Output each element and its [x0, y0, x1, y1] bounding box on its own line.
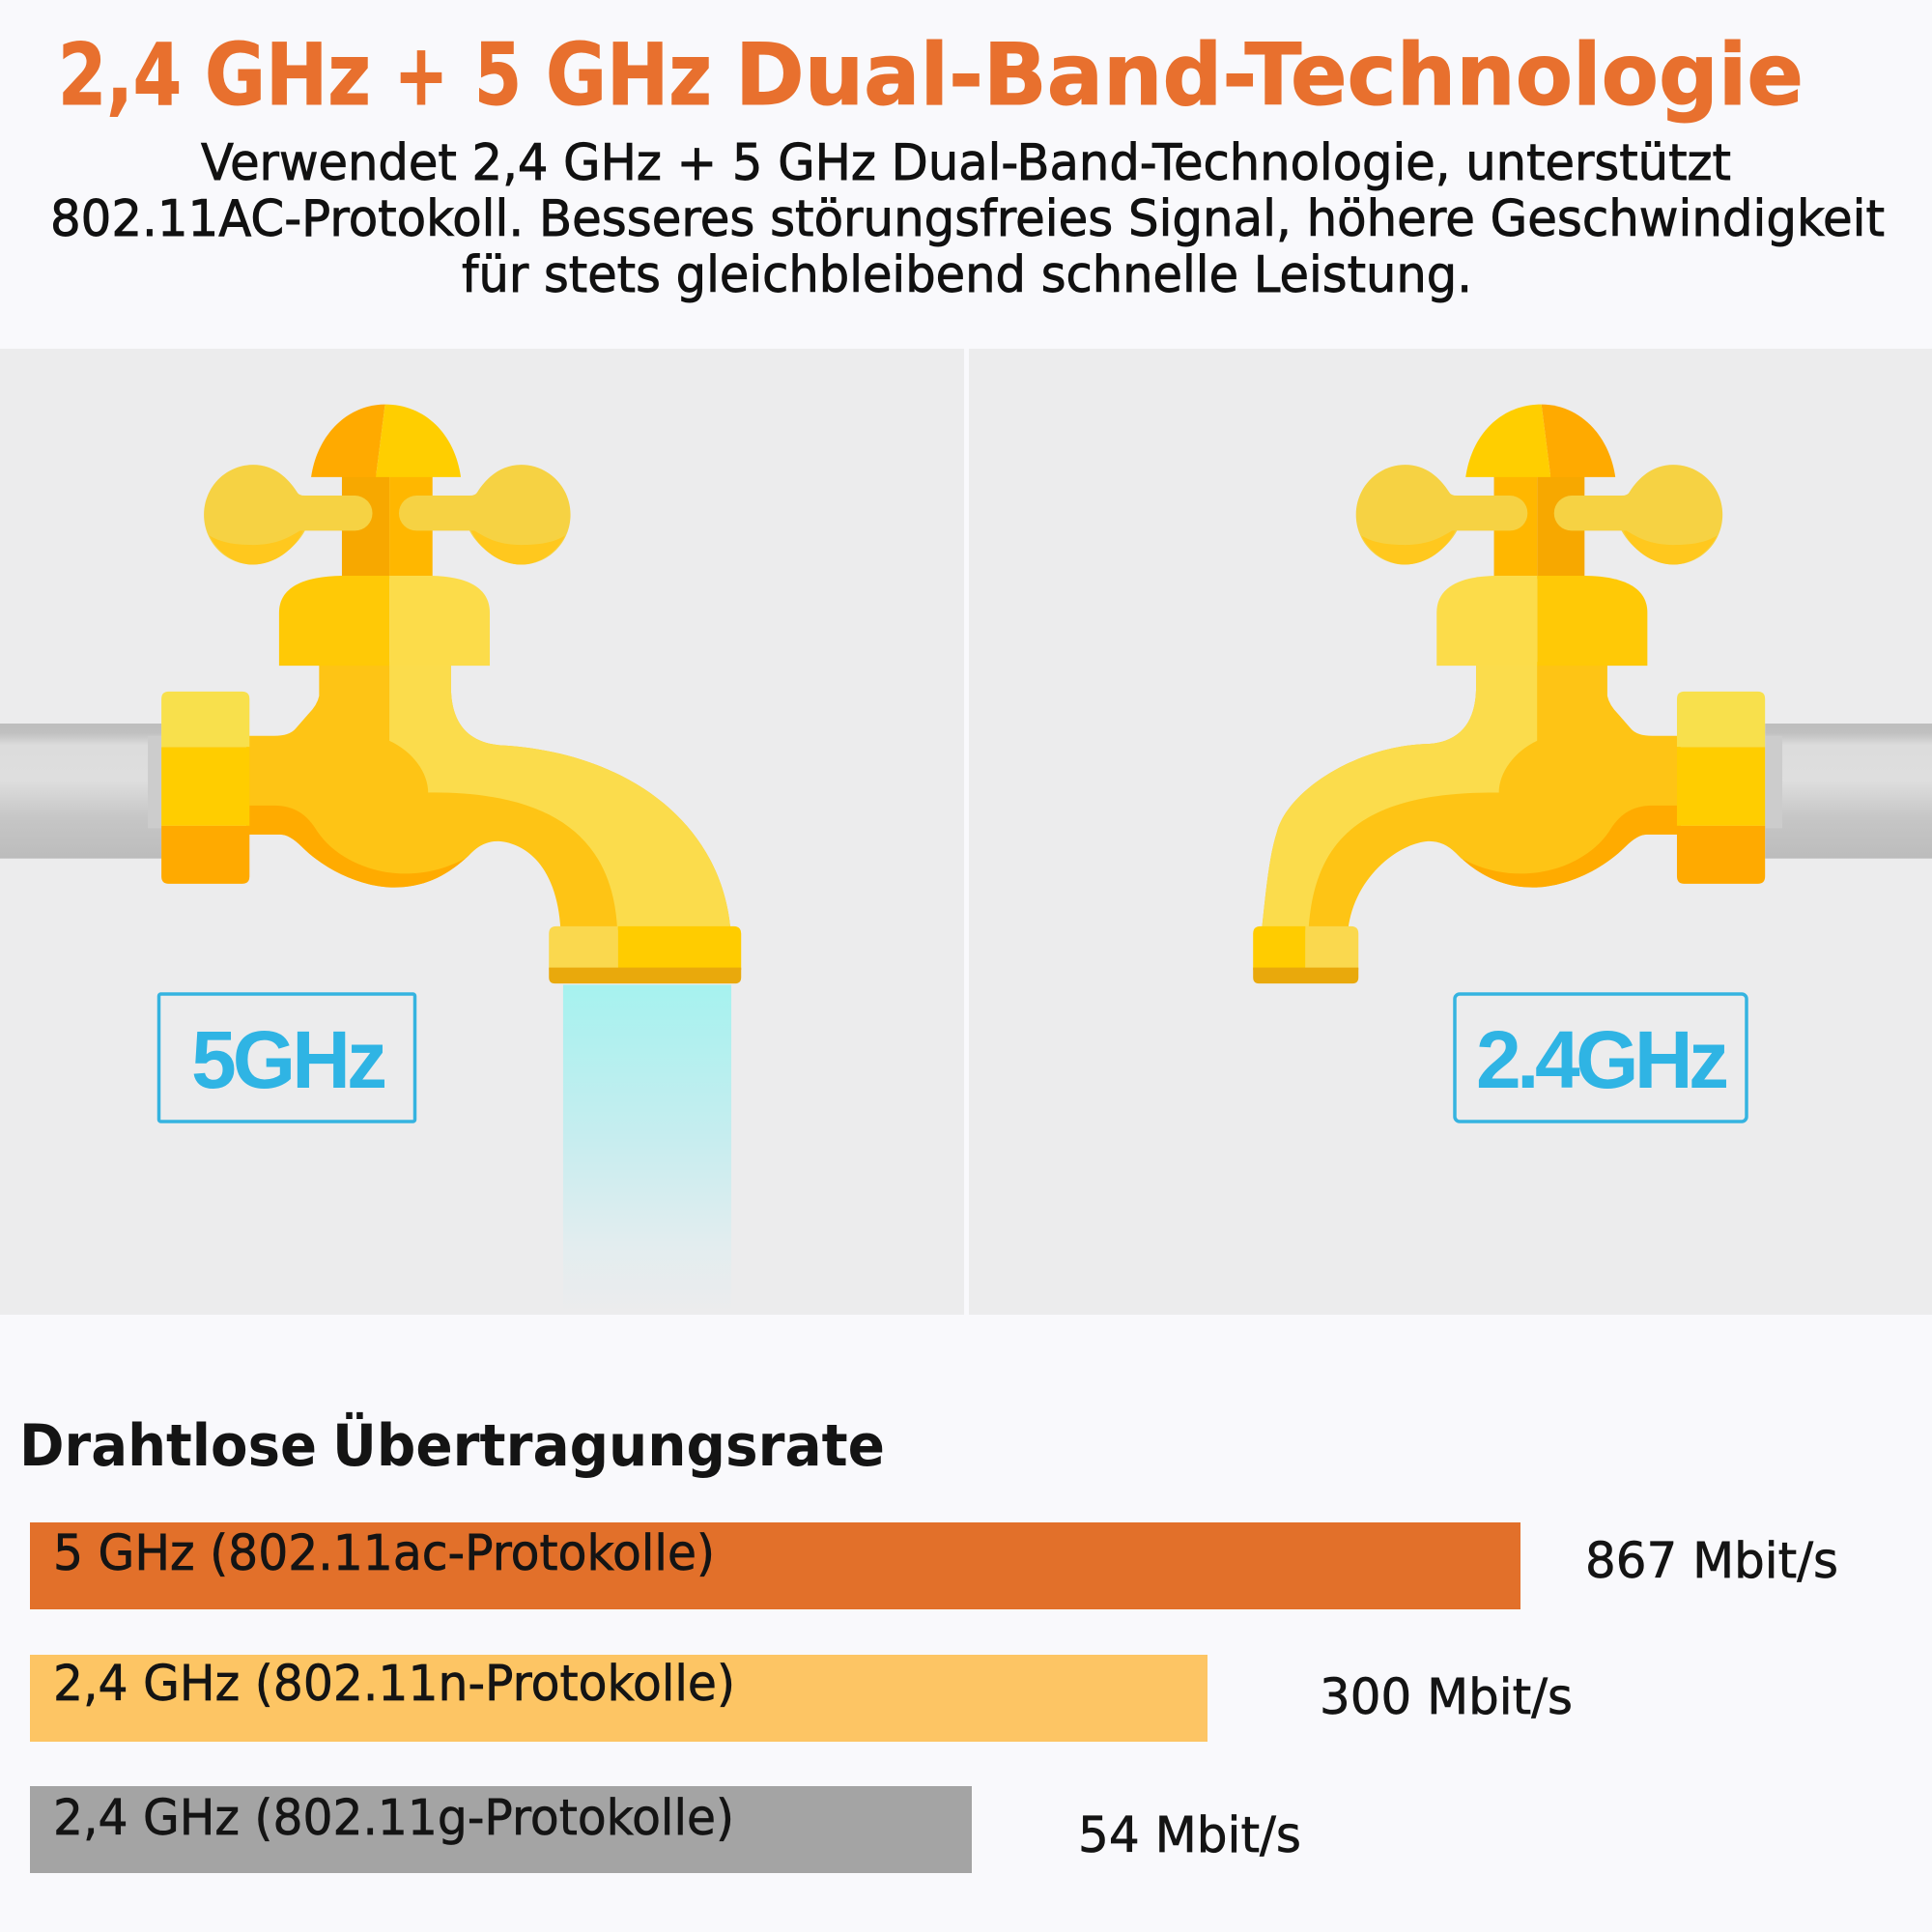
label: 2.4GHz: 2.4GHz [1476, 1014, 1729, 1105]
value: 867 Mbit/s: 867 Mbit/s [1585, 1533, 1838, 1590]
bar: 2,4 GHz n [30, 1655, 1208, 1742]
connector nut [1677, 692, 1765, 884]
chart heading [19, 1411, 885, 1480]
bar: 2,4 GHz n: 2,4 GHz (802.11n-Protokolle) [53, 1656, 735, 1713]
chart heading: Drahtlose [19, 1412, 317, 1480]
connector nut [161, 692, 249, 884]
title: + [394, 25, 448, 125]
value: 300 Mbit/s: 300 Mbit/s [1320, 1669, 1573, 1726]
cap dome [1465, 405, 1615, 477]
title: 5 [474, 25, 522, 125]
bar chart: transmission rates [30, 1522, 1838, 1873]
collar [1436, 576, 1647, 666]
panel: 5 GHz faucet [0, 349, 964, 1315]
title: Dual-Band-Technologie [735, 25, 1804, 125]
chart heading: Übertragungsrate [332, 1411, 885, 1480]
water stream [563, 984, 731, 1314]
bar: 5 GHz: 5 GHz (802.11ac-Protokolle) [53, 1525, 715, 1582]
cap dome [311, 405, 461, 477]
valve stem [1494, 474, 1584, 579]
faucet illustration: dry tap [1253, 405, 1932, 983]
bar: 5 GHz [30, 1522, 1520, 1609]
pipe [0, 724, 161, 859]
title: GHz [205, 25, 371, 125]
faucet illustration: running tap [0, 405, 741, 1314]
label: 5GHz: 5GHz [191, 1014, 387, 1105]
collar [279, 576, 490, 666]
title: GHz [546, 25, 712, 125]
bar: 2,4 GHz g: 2,4 GHz (802.11g-Protokolle) [53, 1790, 734, 1847]
handle left [1356, 465, 1527, 564]
intro text [50, 134, 1885, 304]
faucet body and spout [246, 662, 730, 930]
panel: 2.4 GHz faucet [969, 349, 1932, 1315]
spout tip [549, 926, 741, 983]
spout tip [1253, 926, 1358, 983]
title [58, 25, 1804, 125]
label: 2.4GHz [1455, 994, 1747, 1122]
intro text: Verwendet 2,4 GHz + 5 GHz Dual-Band-Technologie, unterstützt [201, 134, 1731, 192]
handle right [1554, 465, 1722, 564]
intro text: 802.11AC-Protokoll. Besseres störungsfreies Signal, höhere Geschwindigkeit [50, 190, 1885, 248]
valve stem [342, 474, 433, 579]
pipe [1765, 724, 1932, 859]
handle right [399, 465, 571, 564]
faucet body and spout [1262, 662, 1681, 930]
title: 2,4 [58, 25, 182, 125]
label: 5GHz [158, 994, 415, 1122]
intro text: für stets gleichbleibend schnelle Leistung. [462, 246, 1472, 304]
bar: 2,4 GHz g [30, 1786, 972, 1873]
handle left [204, 465, 373, 564]
value: 54 Mbit/s: 54 Mbit/s [1078, 1807, 1301, 1864]
